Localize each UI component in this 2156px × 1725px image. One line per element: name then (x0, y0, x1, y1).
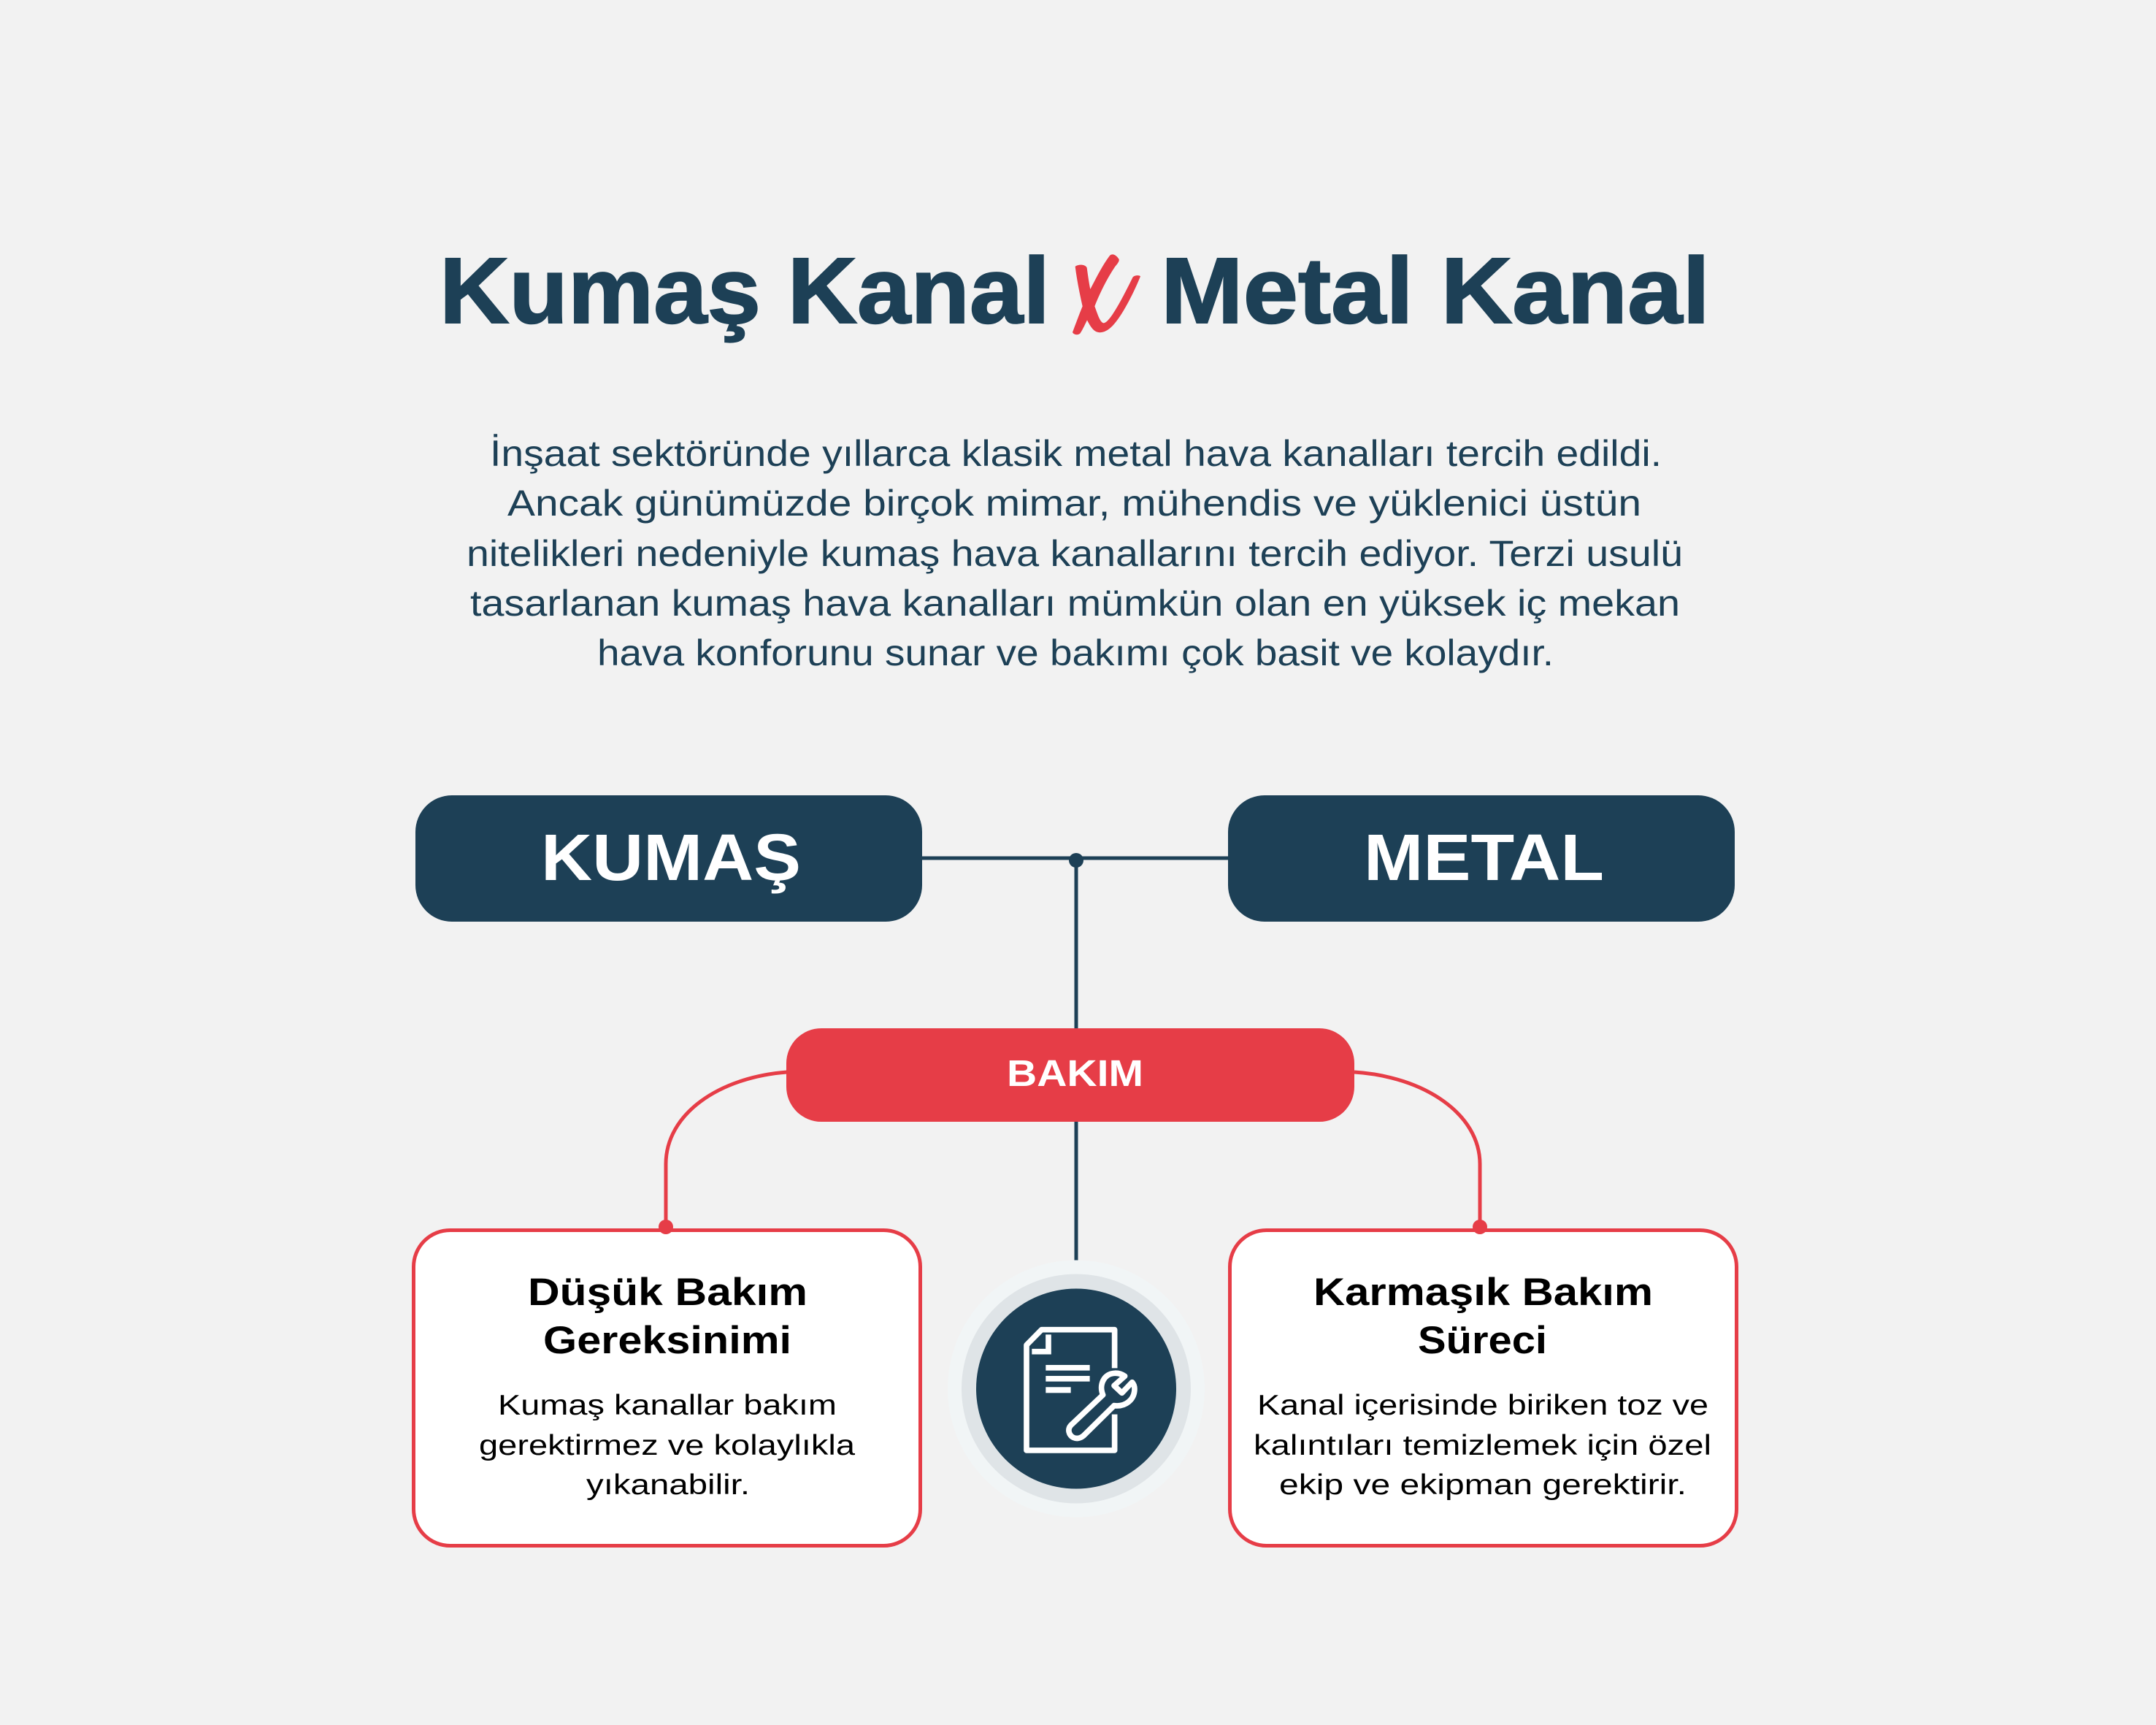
title: right term: Metal Kanal (1161, 239, 1710, 343)
connector: header line with junction and vertical trunk (922, 853, 1228, 1261)
panel: KUMAŞ header: KUMAŞ (541, 822, 801, 895)
card heading: Karmaşık Bakım (1313, 1271, 1653, 1314)
card body text: kalıntıları temizlemek için özel (1254, 1430, 1711, 1461)
title: left term: Kumaş Kanal (440, 239, 1050, 343)
intro paragraph (467, 433, 1683, 673)
card body text: ekip ve ekipman gerektirir. (1279, 1469, 1687, 1501)
panel: METAL header (1228, 795, 1735, 922)
intro paragraph: Ancak günümüzde birçok mimar, mühendis ve yüklenici üstün (507, 483, 1641, 524)
title (440, 239, 1710, 343)
panel: KUMAŞ header (415, 795, 922, 922)
card heading: Gereksinimi (543, 1319, 791, 1362)
card heading: Düşük Bakım (528, 1271, 807, 1314)
card heading (1313, 1271, 1653, 1362)
panel: METAL header: METAL (1364, 822, 1604, 895)
connector: bakım to right card (1354, 1072, 1487, 1234)
intro paragraph: tasarlanan kumaş hava kanalları mümkün olan en yüksek iç mekan (470, 583, 1680, 624)
intro paragraph: İnşaat sektöründe yıllarca klasik metal hava kanalları tercih edildi. (490, 433, 1662, 474)
card heading (528, 1271, 807, 1362)
panel: BAKIM pill: BAKIM (1007, 1052, 1143, 1094)
card body text: Kanal içerisinde biriken toz ve (1257, 1390, 1708, 1421)
icon: red handwritten x (1073, 254, 1140, 334)
panel: right card, metal maintenance (1229, 1230, 1736, 1545)
card body text (1254, 1390, 1711, 1501)
intro paragraph: nitelikleri nedeniyle kumaş hava kanallarını tercih ediyor. Terzi usulü (467, 533, 1683, 574)
card body text (479, 1390, 855, 1501)
intro paragraph: hava konforunu sunar ve bakımı çok basit ve kolaydır. (597, 632, 1554, 673)
card body text: Kumaş kanallar bakım (498, 1390, 837, 1421)
connector: bakım to left card (659, 1072, 787, 1234)
panel: BAKIM pill (786, 1028, 1354, 1122)
icon: maintenance document and wrench in circle (948, 1261, 1205, 1518)
card body text: yıkanabilir. (586, 1469, 750, 1501)
panel: left card, fabric maintenance (413, 1230, 920, 1545)
card body text: gerektirmez ve kolaylıkla (479, 1430, 855, 1461)
card heading: Süreci (1418, 1319, 1547, 1362)
